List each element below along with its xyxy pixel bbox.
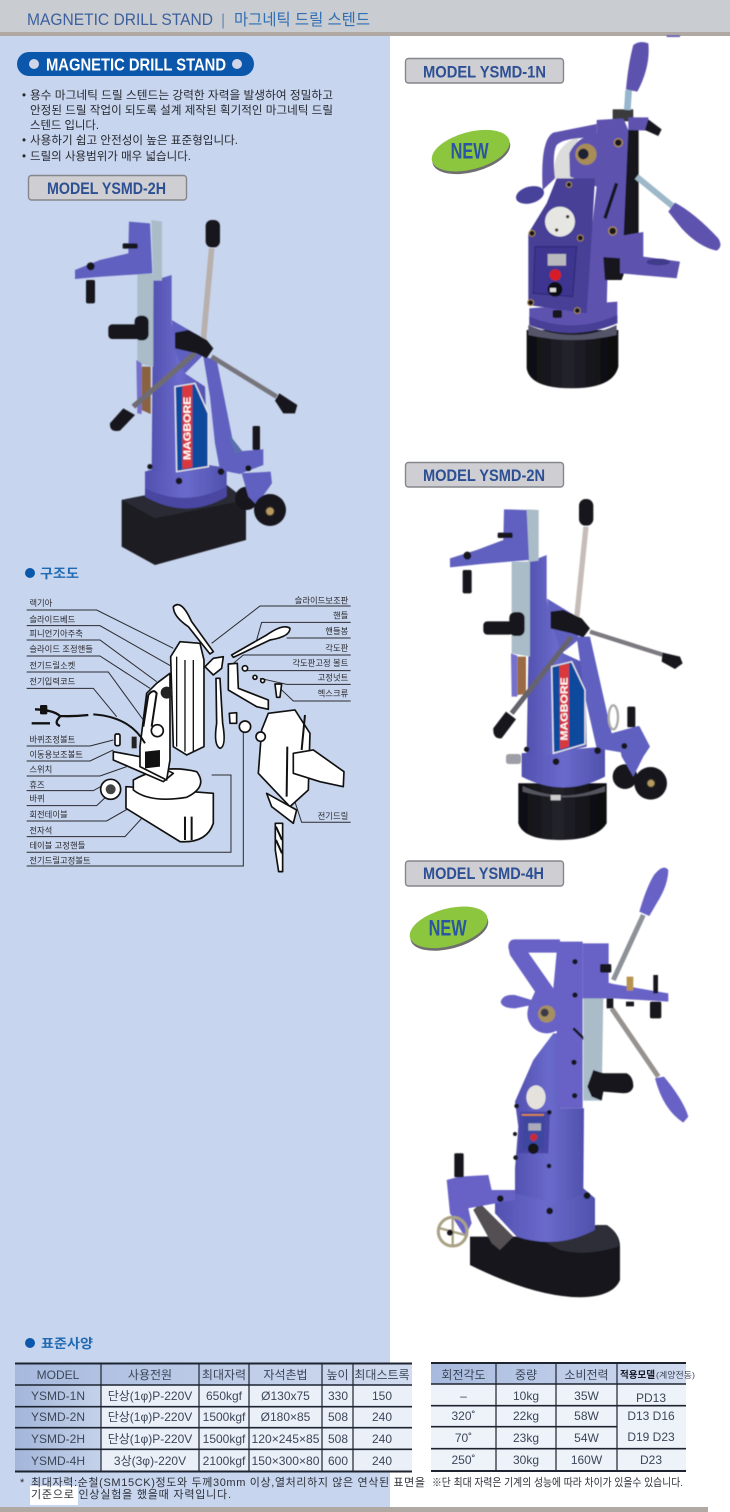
leader lines and part labels: 슬라이드보조판 bbox=[295, 595, 349, 605]
section heading: standard specification: 표준사양 bbox=[41, 1336, 93, 1351]
data rows: YSMD-4H bbox=[31, 1454, 85, 1468]
data rows: Ø180×85 bbox=[261, 1410, 311, 1424]
header row: MODEL bbox=[37, 1368, 80, 1382]
product photo: YSMD-1N bbox=[514, 35, 720, 388]
footnotes: 최대자력:순철(SM15CK)정도와 두께30mm 이상,열처리하지 않은 연삭된 표면을 bbox=[31, 1475, 425, 1489]
intro text block: 용수 마그네틱 드릴 스텐드는 강력한 자력을 발생하여 정밀하고 bbox=[30, 88, 333, 102]
footnotes: * bbox=[20, 1477, 25, 1489]
data rows: 54W bbox=[574, 1431, 600, 1445]
product photo: YSMD-4H bbox=[438, 868, 688, 1297]
data rows: 508 bbox=[328, 1410, 348, 1424]
leader lines and part labels: 바퀴조정볼트 bbox=[29, 735, 76, 745]
data rows: 단상(1φ)P-220V bbox=[108, 1389, 192, 1403]
data rows: 23kg bbox=[513, 1431, 539, 1445]
header row: 최대자력 bbox=[202, 1368, 246, 1382]
header row: 적용모델 bbox=[620, 1369, 655, 1381]
leader lines and part labels: 바퀴 bbox=[29, 794, 45, 804]
intro text block bbox=[22, 88, 333, 163]
leader lines and part labels: 피니언기아주축 bbox=[29, 628, 83, 638]
leader lines and part labels: 이동용보조볼트 bbox=[29, 750, 83, 760]
data rows: 58W bbox=[574, 1409, 600, 1423]
bottom band bbox=[0, 1507, 708, 1512]
header row: 소비전력 bbox=[564, 1368, 609, 1382]
exploded structure diagram bbox=[27, 595, 351, 872]
NEW badge 2: NEW bbox=[429, 915, 467, 940]
header row: 최대스트록 bbox=[354, 1368, 410, 1382]
intro text block: • bbox=[22, 135, 26, 147]
model label YSMD-2N bbox=[406, 462, 564, 487]
product photo: YSMD-2N bbox=[450, 499, 683, 840]
footnotes bbox=[20, 1475, 683, 1505]
leader lines and part labels: 핸들 bbox=[333, 611, 349, 621]
model label YSMD-1N: MODEL YSMD-1N bbox=[423, 64, 546, 82]
leader lines and part labels: 슬라이드 조정핸들 bbox=[29, 644, 93, 654]
NEW badge 2 bbox=[405, 899, 493, 958]
leader lines and part labels: 각도판 bbox=[325, 643, 349, 653]
data rows: 단상(1φ)P-220V bbox=[108, 1432, 192, 1446]
data rows bbox=[451, 1389, 675, 1467]
data rows: YSMD-1N bbox=[31, 1389, 85, 1403]
intro text block: • bbox=[22, 151, 26, 163]
section heading: structure diagram: 구조도 bbox=[40, 566, 79, 581]
intro text block: 안정된 드릴 작업이 되도록 설계 제작된 획기적인 마그네틱 드릴 bbox=[30, 104, 333, 117]
data rows: – bbox=[460, 1389, 467, 1403]
data rows: 240 bbox=[372, 1432, 392, 1446]
data rows: D19 D23 bbox=[627, 1430, 675, 1444]
intro text block: • bbox=[22, 90, 26, 102]
header bar: 마그네틱 드릴 스텐드 bbox=[234, 11, 370, 29]
data rows: 30kg bbox=[513, 1453, 539, 1467]
footnotes: 기준으로 인상실험을 했을때 자력입니다. bbox=[31, 1488, 231, 1501]
product photo: YSMD-2N: MAGBORE bbox=[560, 677, 571, 741]
model label YSMD-1N bbox=[406, 58, 564, 83]
leader lines and part labels: 고정넛트 bbox=[318, 673, 349, 683]
title pill: MAGNETIC DRILL STAND bbox=[46, 54, 226, 74]
model label YSMD-4H bbox=[406, 861, 564, 886]
data rows: 330 bbox=[328, 1389, 348, 1403]
data rows: 2100kgf bbox=[203, 1454, 246, 1468]
header bar: | bbox=[221, 12, 225, 29]
data rows: 단상(1φ)P-220V bbox=[108, 1410, 192, 1424]
data rows: 1500kgf bbox=[203, 1410, 246, 1424]
header row bbox=[37, 1368, 410, 1382]
model label YSMD-2H: MODEL YSMD-2H bbox=[47, 180, 166, 198]
model label YSMD-2H bbox=[28, 176, 186, 200]
data rows: 3상(3φ)-220V bbox=[114, 1454, 186, 1468]
data rows: 250˚ bbox=[451, 1453, 476, 1467]
leader lines and part labels: 회전테이블 bbox=[29, 810, 68, 820]
intro text block: 드릴의 사용범위가 매우 넓습니다. bbox=[30, 150, 191, 163]
data rows: 10kg bbox=[513, 1389, 539, 1403]
leader lines and part labels: 랙기아 bbox=[29, 598, 53, 608]
specification table left bbox=[15, 1363, 412, 1472]
data rows: Ø130x75 bbox=[261, 1389, 310, 1403]
header row bbox=[441, 1368, 695, 1382]
data rows: 70˚ bbox=[455, 1431, 472, 1445]
stand line drawing bbox=[32, 642, 213, 842]
header row: (계양전동) bbox=[656, 1370, 695, 1380]
leader lines and part labels: 휴즈 bbox=[29, 780, 45, 790]
leader lines and part labels: 슬라이드베드 bbox=[29, 614, 76, 624]
handles, brackets and small parts bbox=[173, 605, 290, 748]
header row: 자석촌법 bbox=[263, 1368, 308, 1382]
header bar: MAGNETIC DRILL STAND bbox=[27, 10, 213, 29]
leader lines and part labels: 전자석 bbox=[29, 825, 52, 835]
header row: 사용전원 bbox=[128, 1368, 172, 1382]
data rows: 650kgf bbox=[206, 1389, 243, 1403]
footnotes: ※단 최대 자력은 기계의 성능에 따라 차이가 있을수 있습니다. bbox=[432, 1476, 683, 1489]
data rows: 160W bbox=[571, 1453, 603, 1467]
header row: 중량 bbox=[515, 1368, 537, 1382]
data rows: 150 bbox=[372, 1389, 392, 1403]
leader lines and part labels: 전기입력코드 bbox=[29, 677, 76, 687]
leader lines and part labels: 전기드릴고정볼트 bbox=[29, 855, 91, 865]
data rows: 22kg bbox=[513, 1409, 539, 1423]
data rows: PD13 bbox=[636, 1391, 666, 1405]
data rows: 600 bbox=[328, 1454, 348, 1468]
leader lines and part labels: 테이블 고정핸들 bbox=[29, 840, 86, 850]
data rows bbox=[31, 1389, 392, 1468]
NEW badge 1: NEW bbox=[451, 139, 489, 164]
data rows: 1500kgf bbox=[203, 1432, 246, 1446]
data rows: D13 D16 bbox=[627, 1409, 675, 1423]
data rows: D23 bbox=[640, 1453, 662, 1467]
leader lines and part labels bbox=[27, 595, 351, 866]
section heading: structure diagram bbox=[25, 566, 79, 581]
header row: 높이 bbox=[326, 1368, 349, 1382]
leader lines and part labels: 스위치 bbox=[29, 764, 52, 774]
intro text block: 스텐드 입니다. bbox=[30, 119, 99, 132]
data rows: 240 bbox=[372, 1454, 392, 1468]
model label YSMD-2N: MODEL YSMD-2N bbox=[423, 467, 545, 485]
leader lines and part labels: 핸들봉 bbox=[325, 626, 349, 636]
data rows: 508 bbox=[328, 1432, 348, 1446]
data rows: 320˚ bbox=[451, 1409, 476, 1423]
page background panel bbox=[0, 36, 390, 1507]
specification table right bbox=[431, 1363, 695, 1471]
data rows: 35W bbox=[574, 1389, 600, 1403]
data rows: YSMD-2H bbox=[31, 1432, 85, 1446]
product photo: YSMD-2H bbox=[75, 220, 297, 565]
leader lines and part labels: 전기드릴소켓 bbox=[29, 661, 76, 671]
leader lines and part labels: 헥스크류 bbox=[318, 689, 349, 699]
leader lines and part labels: 전기드릴 bbox=[318, 811, 348, 821]
data rows: 150×300×80 bbox=[252, 1454, 320, 1468]
data rows: 240 bbox=[372, 1410, 392, 1424]
header bar bbox=[0, 0, 730, 36]
electric drill line drawing bbox=[256, 710, 344, 872]
data rows: 120×245×85 bbox=[252, 1432, 320, 1446]
product photo: YSMD-2H: MAGBORE bbox=[183, 396, 194, 460]
data rows: YSMD-2N bbox=[31, 1410, 85, 1424]
leader lines and part labels: 각도판고정 볼트 bbox=[292, 658, 349, 668]
intro text block: 사용하기 쉽고 안전성이 높은 표준형입니다. bbox=[30, 133, 238, 147]
header row: 회전각도 bbox=[441, 1368, 486, 1382]
NEW badge 1 bbox=[427, 122, 515, 182]
model label YSMD-4H: MODEL YSMD-4H bbox=[423, 865, 544, 883]
